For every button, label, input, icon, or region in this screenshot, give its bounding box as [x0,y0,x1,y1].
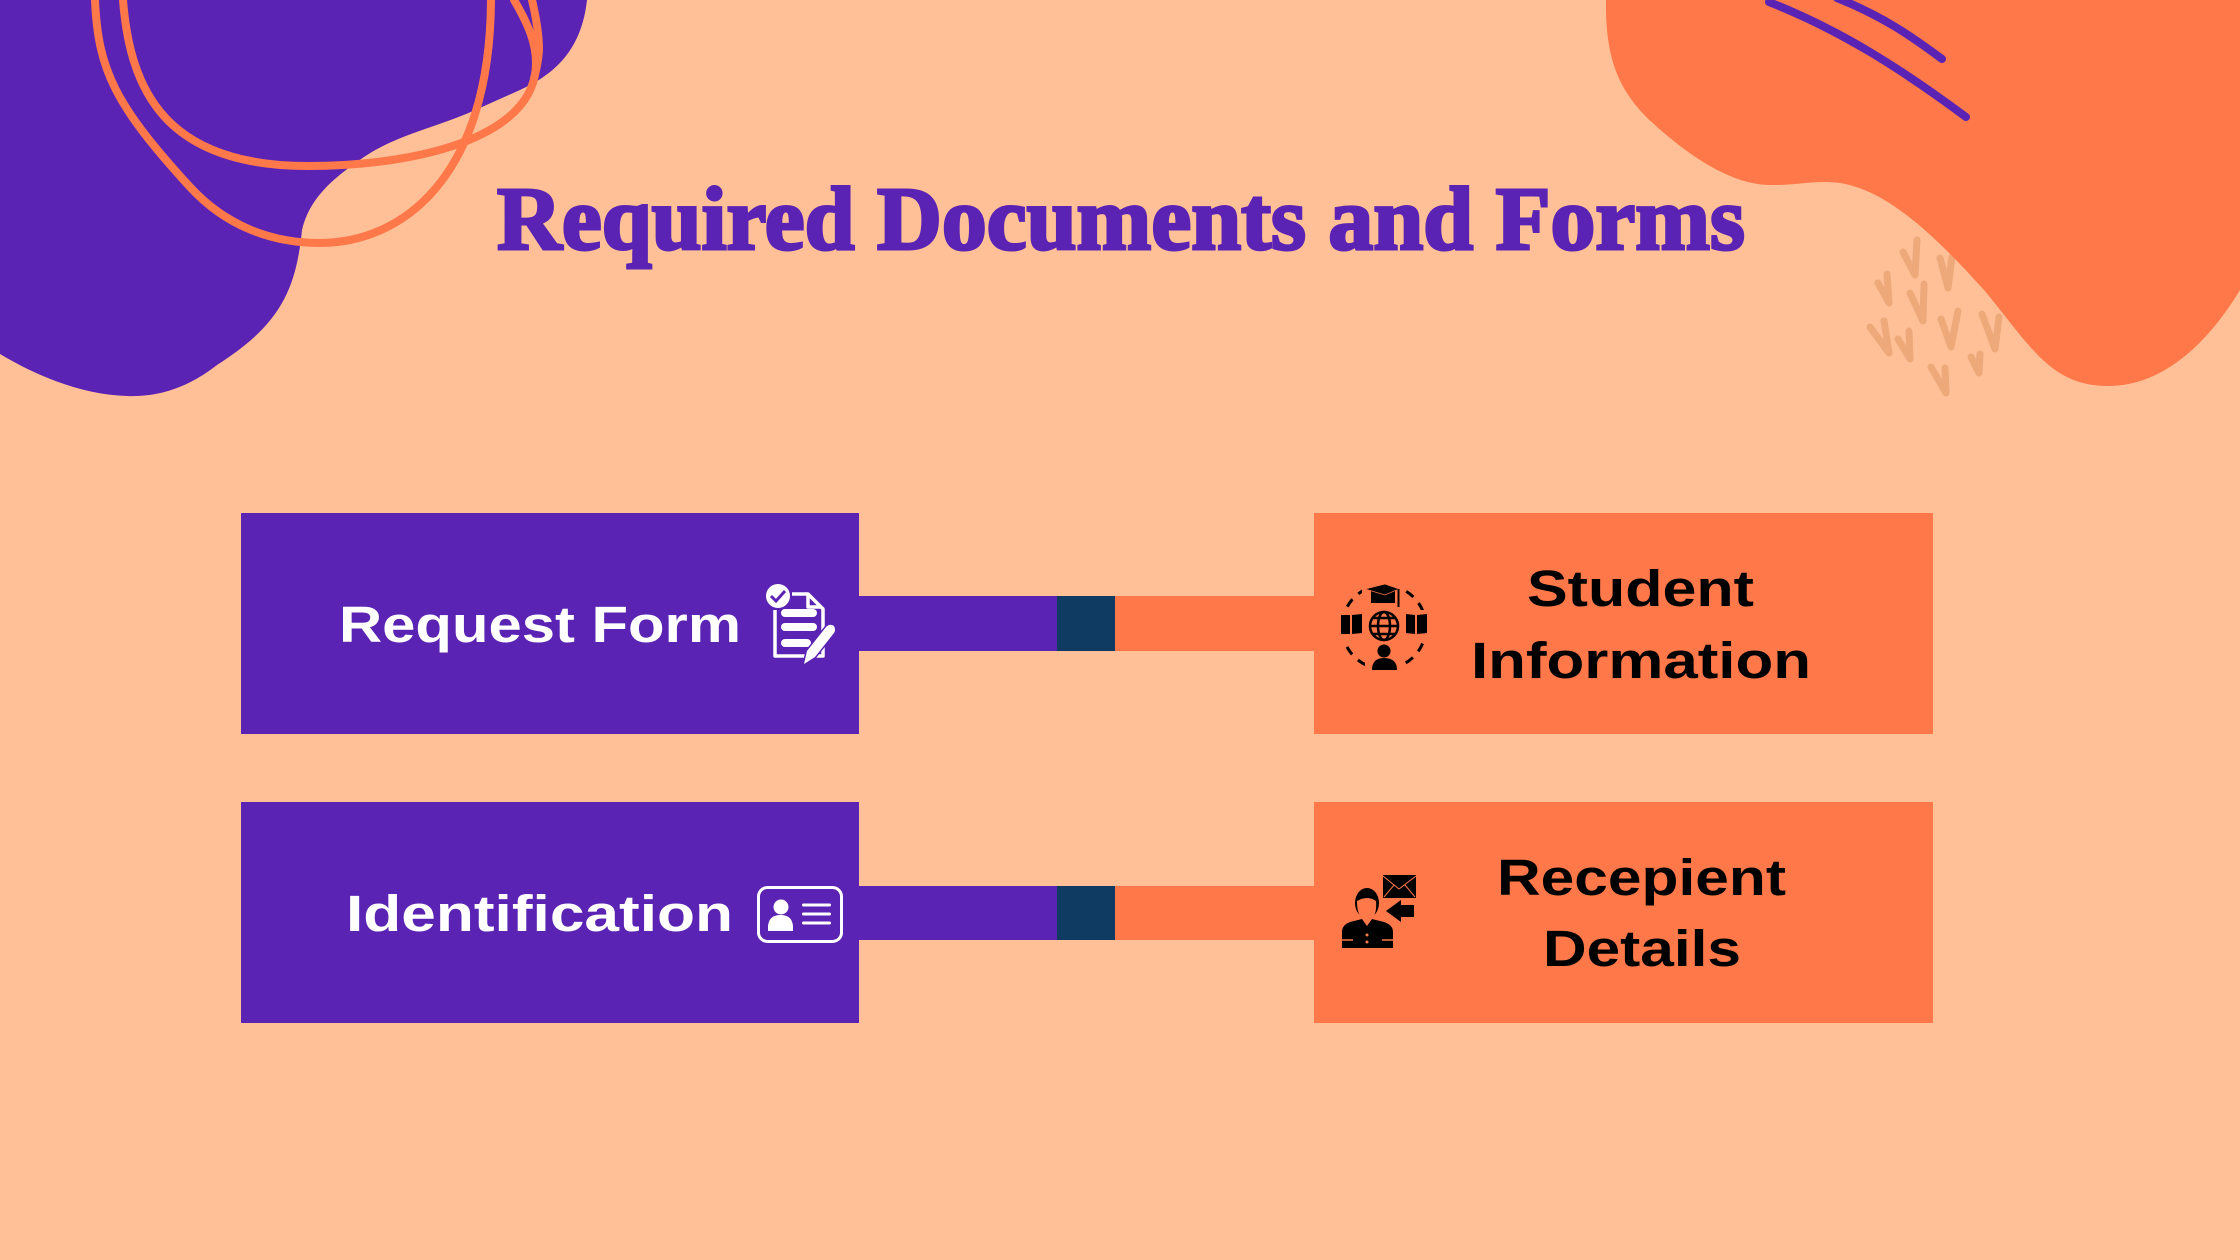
label: student information: Student [1527,560,1754,617]
icon: person with envelope [1342,875,1416,948]
orange scribble loops [95,0,539,243]
icon: id card [758,888,842,942]
panel: student information [1314,513,1933,734]
purple accent strokes [1769,0,1966,117]
label: recepient details: Details [1543,920,1741,977]
label: student information: Information [1471,632,1811,689]
label: recepient details [1497,849,1786,977]
label: student information [1471,560,1811,689]
orange blob top right [1606,0,2240,386]
panel: identification [241,802,859,1023]
purple blob top left [0,0,587,396]
connector row 2 [859,886,1314,940]
label: identification: Identification [346,885,733,942]
connector row 1 [859,596,1314,651]
panel: request form [241,513,859,734]
icon: document with check and pencil [766,584,835,664]
label: recepient details: Recepient [1497,849,1786,906]
decorative chevron marks [1870,240,1999,393]
panel: recepient details [1314,802,1933,1023]
icon: graduation globe [1336,580,1432,672]
title: Required Documents and Forms [497,170,1745,269]
label: request form: Request Form [339,596,741,653]
